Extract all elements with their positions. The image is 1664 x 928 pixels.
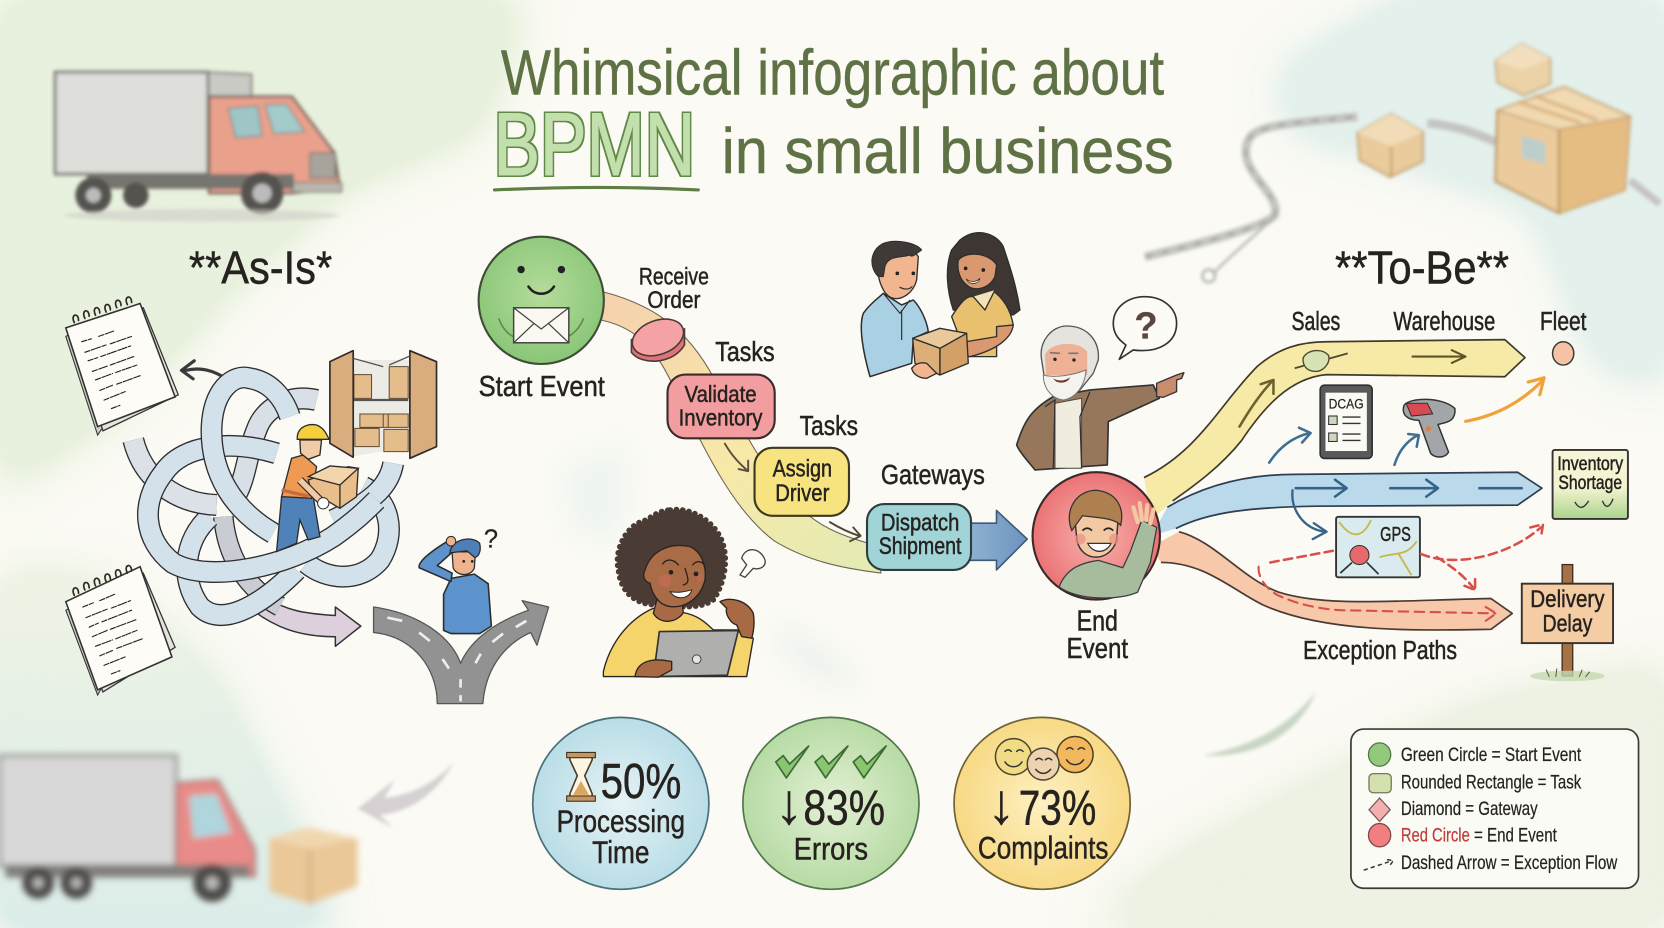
task: validate inventory <box>668 375 775 438</box>
map: GPS <box>1336 517 1420 577</box>
icon: tablet checklist: DCAG <box>1329 397 1364 412</box>
lane: orange exception path <box>1151 532 1512 630</box>
label: end event: End <box>1077 605 1118 637</box>
note: inventory shortage <box>1553 450 1628 519</box>
title: Whimsical infographic about <box>501 37 1164 108</box>
red puck shape <box>627 312 689 362</box>
as-is panel: tangled process <box>66 297 549 704</box>
hand pointing <box>1157 373 1184 397</box>
icon: forked road with confused driver <box>374 526 549 704</box>
label: start event: Start Event <box>479 371 605 403</box>
task: assign driver: Driver <box>775 480 829 507</box>
exception arrows: dashed <box>1270 524 1543 590</box>
icons: smileys <box>995 736 1093 780</box>
faint blurred arrow, bottom left <box>358 762 454 828</box>
KPI: complaints: Complaints <box>978 830 1108 866</box>
man in blue shirt <box>861 241 928 377</box>
legend: diamond: Diamond = Gateway <box>1401 799 1538 820</box>
icon: notebook bottom <box>66 566 175 695</box>
lane labels <box>1292 308 1587 336</box>
KPI: errors: Errors <box>794 831 868 867</box>
label: tasks 1: Tasks <box>715 336 775 367</box>
tablet <box>653 631 738 677</box>
KPI: processing time <box>533 717 709 889</box>
lane labels: Warehouse <box>1393 308 1495 336</box>
head <box>1041 326 1098 400</box>
task: dispatch shipment: Dispatch <box>881 510 959 537</box>
legend <box>1351 729 1639 888</box>
heading: As-Is: **As-Is* <box>189 241 332 293</box>
illustration: couple exchanging a package <box>861 233 1020 378</box>
task: dispatch shipment <box>867 504 971 570</box>
heading: To-Be: **To-Be** <box>1335 241 1509 293</box>
icon: tablet checklist <box>1320 385 1372 458</box>
arrow: blue to scanner <box>1394 434 1419 465</box>
icons: green checks <box>776 746 886 778</box>
legend: green circle: Green Circle = Start Event <box>1401 745 1582 766</box>
KPI: processing time: Processing <box>557 803 685 839</box>
task: validate inventory: Validate <box>684 381 757 407</box>
lane labels: Sales <box>1292 308 1340 336</box>
end event <box>1033 472 1160 665</box>
faint blurred leaf stroke, bottom centre <box>1202 692 1316 756</box>
icon: barcode scanner <box>1403 399 1455 457</box>
legend: red circle <box>1368 824 1557 847</box>
task: assign driver: Assign <box>773 455 832 482</box>
legend: rounded rectangle: Rounded Rectangle = Task <box>1401 772 1582 793</box>
blurred truck, top left <box>55 72 342 222</box>
start event <box>479 237 605 403</box>
icon: hourglass <box>567 752 595 801</box>
illustration: woman with afro and tablet <box>603 509 765 677</box>
receive order task: Order <box>647 287 700 314</box>
illustration: old man pointing with question bubble <box>1017 297 1184 470</box>
small flow arrow <box>725 444 748 471</box>
note: inventory shortage: Shortage <box>1558 473 1622 494</box>
arrow: mauve exit arrow <box>253 597 361 646</box>
process flow band <box>589 289 881 573</box>
legend: dashed arrow: Dashed Arrow = Exception Flow <box>1401 853 1617 874</box>
arrow: tangle to notebook <box>181 361 228 380</box>
shirt <box>1055 398 1082 468</box>
afro hair <box>617 509 725 607</box>
warehouse shelves <box>330 351 437 458</box>
driver figure: ? <box>484 526 498 554</box>
KPI: errors: ↓ <box>775 773 803 837</box>
task: validate inventory: Inventory <box>679 405 763 431</box>
task: assign driver <box>755 448 849 516</box>
small flow arrow <box>830 522 861 541</box>
KPI: complaints: ↓ <box>987 773 1016 837</box>
title <box>493 37 1174 194</box>
speech bubble <box>1113 297 1177 359</box>
arrow: orange to fleet <box>1466 378 1544 421</box>
hands <box>635 660 672 677</box>
neck and face <box>653 600 683 621</box>
sign: delivery delay <box>1522 565 1613 681</box>
icon: notebook top <box>66 297 178 435</box>
legend: diamond <box>1369 798 1538 821</box>
label: tasks 2: Tasks <box>800 410 858 441</box>
arrow: blue to tablet <box>1269 428 1311 463</box>
sign: delivery delay: Delay <box>1542 610 1593 637</box>
arrow: dispatch to end event <box>966 510 1027 570</box>
KPI: complaints <box>954 717 1130 889</box>
title underline <box>495 188 698 190</box>
legend: red circle: = End Event <box>1474 826 1557 847</box>
legend: red circle: Red Circle <box>1401 826 1470 847</box>
lane: blue warehouse <box>1151 472 1542 539</box>
end event: Event <box>1067 633 1128 665</box>
KPI: processing time: 50% <box>601 755 681 809</box>
title highlight: BPMN: BPMN <box>493 94 695 194</box>
woman in yellow shirt <box>947 233 1020 357</box>
KPI: errors <box>743 717 919 889</box>
fleet node <box>1553 342 1574 365</box>
label: exception paths: Exception Paths <box>1303 637 1457 665</box>
task: dispatch shipment: Shipment <box>879 533 962 560</box>
tangled loops <box>133 351 437 615</box>
legend: green circle <box>1368 743 1582 766</box>
lightbulb doodle <box>740 550 765 577</box>
KPI: processing time: Time <box>592 834 649 870</box>
sign: delivery delay: Delivery <box>1530 586 1605 613</box>
start event circle with envelope <box>479 237 604 364</box>
note: inventory shortage: Inventory <box>1557 454 1624 475</box>
speech bubble: ? <box>1134 304 1158 347</box>
driver figure <box>419 526 498 634</box>
label: receive order: Receive <box>639 263 709 290</box>
to-be panel: swimlanes <box>1144 308 1628 681</box>
label: gateways: Gateways <box>881 459 985 490</box>
end event circle with waving person <box>1033 472 1160 600</box>
title: in small business <box>722 116 1174 187</box>
blurred boxes and winding road, top right <box>1145 44 1660 282</box>
blurred truck and box, bottom left <box>0 756 358 904</box>
yellow shirt <box>603 608 753 677</box>
lane: yellow sales <box>1144 340 1525 520</box>
KPI: errors: 83% <box>803 782 885 836</box>
map: GPS: GPS <box>1380 524 1411 546</box>
worker carrying a box <box>277 425 358 552</box>
lane labels: Fleet <box>1540 308 1587 336</box>
receive order task <box>627 263 709 362</box>
package <box>912 328 968 378</box>
KPI: complaints: 73% <box>1019 782 1096 836</box>
legend: rounded rectangle <box>1369 772 1582 793</box>
brown jacket body <box>1017 385 1159 470</box>
